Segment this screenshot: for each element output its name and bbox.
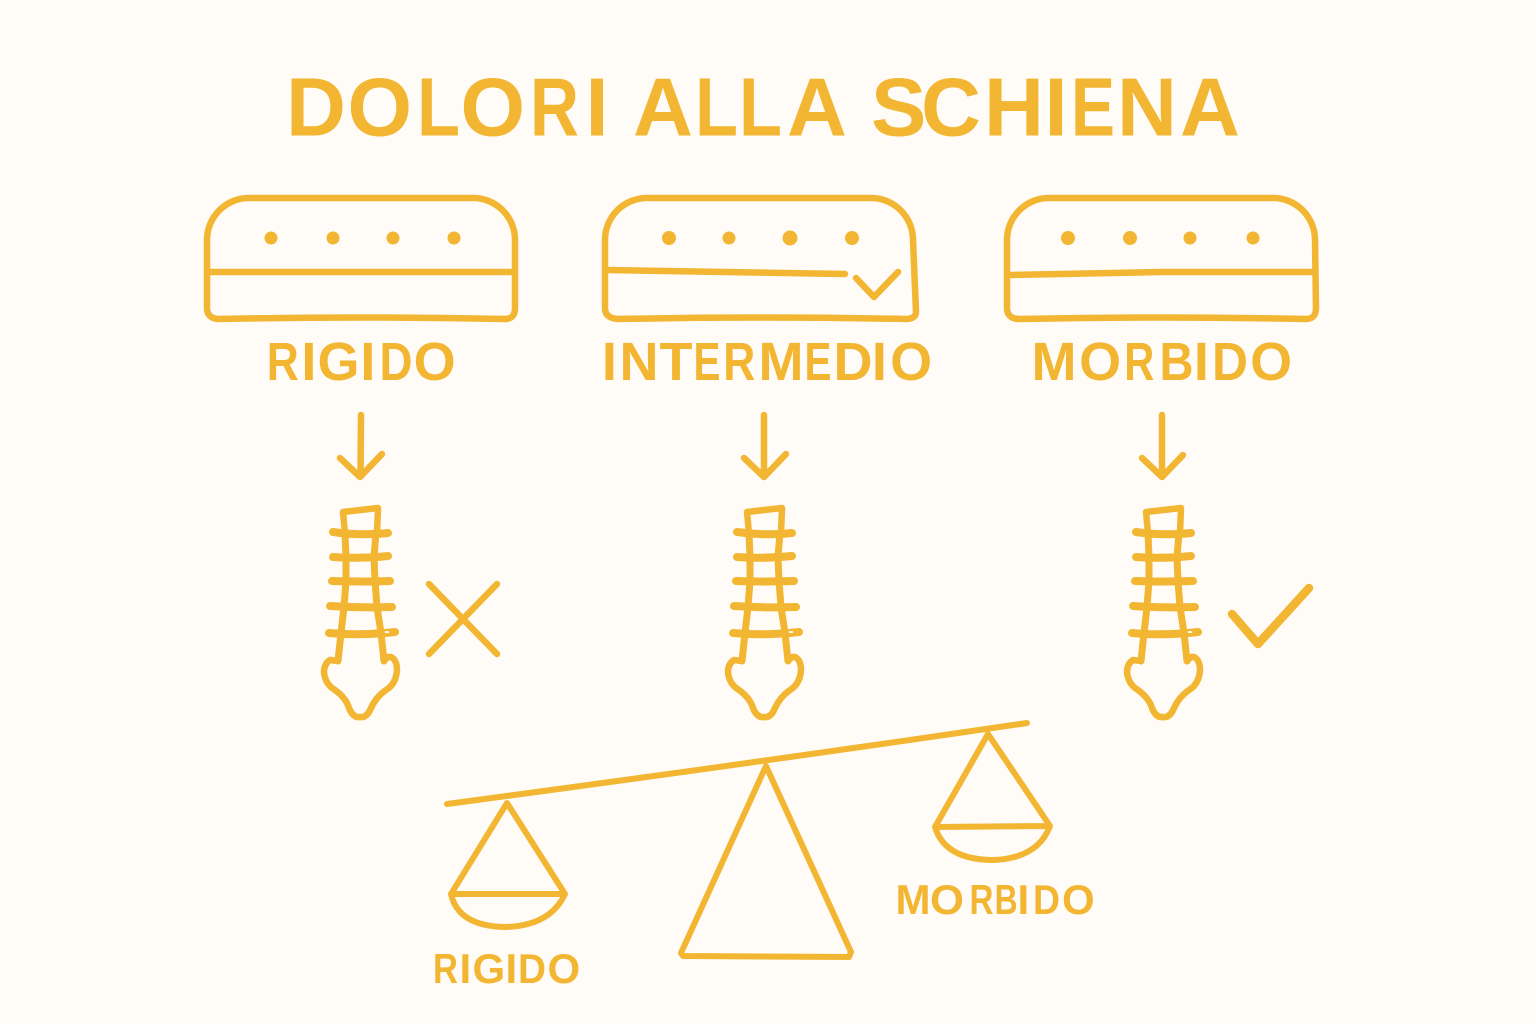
- title: A: [787, 60, 847, 154]
- label: morbido: O: [1062, 876, 1095, 923]
- title: [286, 60, 1240, 154]
- label: rigido: D: [380, 332, 412, 392]
- label: morbido: O: [1079, 332, 1121, 392]
- arrow: [340, 415, 382, 477]
- label: rigido: R: [267, 332, 299, 392]
- panel: morbido column: [1007, 198, 1316, 717]
- label: intermedio: I: [872, 332, 887, 392]
- title: H: [984, 60, 1044, 154]
- beam: [447, 723, 1027, 804]
- label: morbido: O: [930, 876, 964, 923]
- title: E: [1071, 60, 1115, 154]
- label: intermedio: E: [694, 332, 720, 392]
- label: rigido: R: [433, 945, 458, 992]
- label: rigido: O: [548, 945, 580, 992]
- label: morbido: B: [995, 876, 1018, 923]
- icon: soft mattress: [1007, 198, 1316, 319]
- right pan: [935, 734, 1050, 860]
- label: rigido: I: [301, 332, 316, 392]
- label: rigido: I: [506, 945, 517, 992]
- title: O: [348, 60, 412, 154]
- icon: spine: [324, 508, 397, 717]
- title: C: [921, 60, 981, 154]
- label: morbido: B: [1160, 332, 1194, 392]
- title: A: [633, 60, 693, 154]
- panel: intermedio column: [602, 198, 932, 717]
- panel: rigido column: [207, 198, 515, 717]
- icon: spine: [1127, 508, 1200, 717]
- title: O: [460, 60, 525, 154]
- title: A: [1180, 60, 1240, 154]
- label: morbido: R: [1124, 332, 1154, 392]
- label: rigido: I: [460, 945, 471, 992]
- label: morbido: I: [1018, 876, 1029, 923]
- label: morbido: R: [970, 876, 994, 923]
- icon: rigid mattress: [207, 198, 515, 319]
- arrow: [1142, 415, 1183, 477]
- title: R: [530, 60, 579, 154]
- label: intermedio: T: [660, 332, 692, 392]
- label: morbido: D: [1212, 332, 1248, 392]
- label: intermedio: M: [758, 332, 803, 392]
- label: morbido: I: [1194, 332, 1209, 392]
- label: intermedio: N: [620, 332, 658, 392]
- label: morbido: D: [1033, 876, 1060, 923]
- chart: balance scale: [433, 723, 1095, 992]
- label: rigido: G: [472, 945, 505, 992]
- title: D: [286, 60, 346, 154]
- label: morbido: O: [1250, 332, 1292, 392]
- icon: medium mattress with check: [605, 198, 916, 319]
- arrow: [744, 415, 786, 477]
- title: S: [871, 60, 926, 154]
- icon: spine: [728, 508, 801, 717]
- fulcrum: [681, 766, 851, 957]
- label: morbido: M: [1032, 332, 1076, 392]
- label: intermedio: D: [834, 332, 872, 392]
- label: intermedio: R: [723, 332, 755, 392]
- title: I: [586, 60, 609, 154]
- title: N: [1117, 60, 1177, 154]
- title: I: [1044, 60, 1068, 154]
- label: rigido: I: [360, 332, 375, 392]
- label: morbido: M: [896, 876, 930, 923]
- icon: check: [1232, 588, 1309, 644]
- label: intermedio: E: [804, 332, 832, 392]
- label: rigido: O: [414, 332, 456, 392]
- label: intermedio: I: [602, 332, 617, 392]
- label: rigido: D: [518, 945, 546, 992]
- icon: cross: [429, 584, 497, 654]
- title: L: [695, 60, 738, 154]
- title: L: [739, 60, 782, 154]
- left pan: [451, 803, 565, 927]
- title: L: [417, 60, 460, 154]
- label: rigido: G: [318, 332, 360, 392]
- label: intermedio: O: [890, 332, 932, 392]
